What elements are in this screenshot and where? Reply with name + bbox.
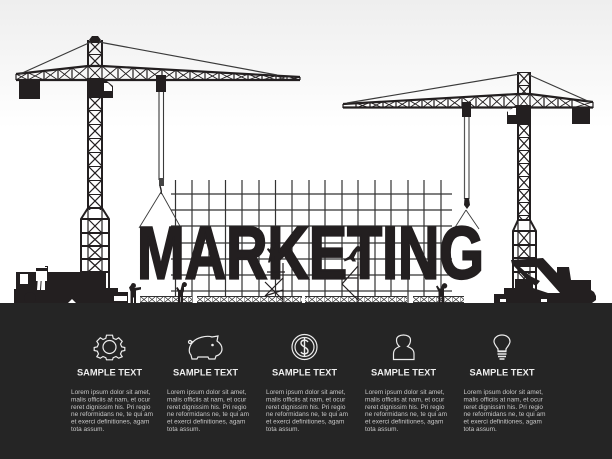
text block: ne reformidans ne, te qui am bbox=[167, 411, 249, 418]
text block: ne reformidans ne, te qui am bbox=[266, 411, 348, 418]
text block: tota assum. bbox=[167, 426, 200, 433]
text block: tota assum. bbox=[266, 426, 299, 433]
right crane counterweight bbox=[572, 107, 590, 124]
worker on walkway bbox=[176, 282, 187, 303]
text block: reret dignissim his. Pri regio bbox=[365, 404, 445, 411]
text block: tota assum. bbox=[71, 426, 104, 433]
text block bbox=[464, 389, 545, 433]
heading: SAMPLE TEXT bbox=[272, 368, 337, 378]
text block: et exerci definitiones, agam bbox=[365, 419, 443, 426]
right crane bbox=[343, 72, 593, 294]
icon: coin bbox=[292, 334, 317, 360]
worker with camera bbox=[129, 283, 141, 304]
text block: tota assum. bbox=[365, 426, 398, 433]
icon: piggy bank bbox=[188, 336, 222, 359]
left crane bbox=[16, 36, 300, 300]
left crane trolley and cable bbox=[156, 75, 166, 194]
scaffolding grid bbox=[171, 180, 452, 304]
excavator bbox=[494, 258, 596, 303]
worker right bbox=[436, 283, 447, 304]
column 4 bbox=[365, 335, 447, 433]
column 2 bbox=[167, 336, 249, 433]
text block bbox=[71, 389, 153, 433]
right crane trolley and cable bbox=[462, 102, 471, 209]
left crane counterweight bbox=[19, 80, 40, 99]
text block: tota assum. bbox=[464, 426, 497, 433]
left crane cab bbox=[87, 78, 113, 98]
text block: malis officiis at nam, et ocur bbox=[71, 396, 151, 403]
text block: malis officiis at nam, et ocur bbox=[167, 396, 247, 403]
text block: Lorem ipsum dolor sit amet, bbox=[365, 389, 445, 396]
text block: Lorem ipsum dolor sit amet, bbox=[71, 389, 151, 396]
column 5 bbox=[464, 335, 545, 433]
text block: ne reformidans ne, te qui am bbox=[71, 411, 153, 418]
text block: reret dignissim his. Pri regio bbox=[71, 404, 151, 411]
workers bbox=[129, 243, 447, 304]
title: MARKETING: MARKETING bbox=[137, 212, 484, 294]
left crane tie ropes bbox=[20, 42, 277, 75]
heading: SAMPLE TEXT bbox=[469, 368, 535, 378]
text block: et exerci definitiones, agam bbox=[167, 419, 245, 426]
left crane sling bbox=[139, 192, 181, 228]
text block bbox=[365, 389, 447, 433]
text block bbox=[167, 389, 249, 433]
text block: et exerci definitiones, agam bbox=[464, 419, 542, 426]
column 3 bbox=[266, 334, 348, 433]
text block bbox=[266, 389, 348, 433]
text block: ne reformidans ne, te qui am bbox=[365, 411, 447, 418]
dark footer panel bbox=[0, 303, 612, 459]
right crane tower bbox=[513, 72, 536, 294]
text block: Lorem ipsum dolor sit amet, bbox=[167, 389, 247, 396]
right crane jib bbox=[343, 94, 593, 108]
right crane sling bbox=[454, 210, 479, 229]
heading: SAMPLE TEXT bbox=[173, 368, 238, 378]
text block: et exerci definitiones, agam bbox=[71, 419, 149, 426]
text block: reret dignissim his. Pri regio bbox=[167, 404, 247, 411]
text block: malis officiis at nam, et ocur bbox=[365, 396, 445, 403]
icon: light bulb bbox=[494, 335, 510, 359]
text block: malis officiis at nam, et ocur bbox=[464, 396, 544, 403]
text block: malis officiis at nam, et ocur bbox=[266, 396, 346, 403]
text block: reret dignissim his. Pri regio bbox=[464, 404, 543, 411]
right crane cab bbox=[507, 105, 531, 124]
worker climbing bbox=[344, 246, 361, 262]
icon: person bbox=[394, 335, 414, 360]
right crane tie ropes bbox=[347, 74, 590, 103]
left crane tower bbox=[81, 36, 109, 300]
heading: SAMPLE TEXT bbox=[371, 368, 436, 378]
left crane jib bbox=[16, 66, 300, 80]
text block: Lorem ipsum dolor sit amet, bbox=[266, 389, 346, 396]
text block: reret dignissim his. Pri regio bbox=[266, 404, 346, 411]
walkway planks bbox=[140, 296, 464, 303]
icon: gear bbox=[94, 335, 125, 360]
text block: et exerci definitiones, agam bbox=[266, 419, 344, 426]
worker on scaffold upper left bbox=[267, 243, 276, 262]
heading: SAMPLE TEXT bbox=[77, 368, 142, 378]
stair scaffolds bbox=[265, 262, 358, 303]
dump truck bbox=[14, 266, 128, 304]
text block: Lorem ipsum dolor sit amet, bbox=[464, 389, 543, 396]
column 1 bbox=[71, 335, 153, 433]
text block: ne reformidans ne, te qui am bbox=[464, 411, 545, 418]
